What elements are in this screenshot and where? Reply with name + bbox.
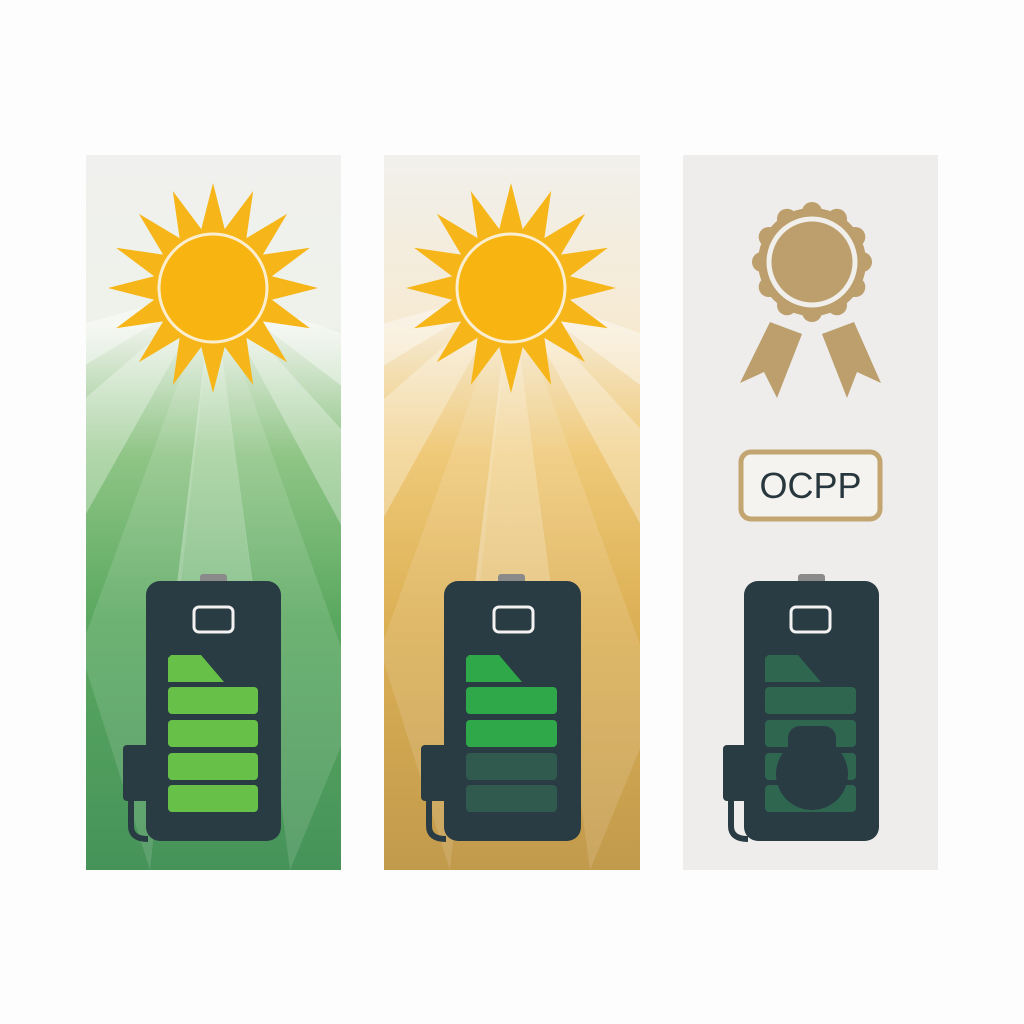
panel: solar green xyxy=(86,155,341,870)
OCPP label: OCPP xyxy=(759,465,862,506)
icon: sun xyxy=(406,183,616,393)
OCPP label xyxy=(741,452,880,519)
panel: certification xyxy=(683,155,938,870)
light beams green xyxy=(86,327,341,870)
panel: solar amber xyxy=(384,155,640,870)
icon: battery with charger plug xyxy=(723,574,879,841)
icon: battery full xyxy=(123,574,281,841)
icon: award badge xyxy=(740,202,881,398)
light beams amber xyxy=(384,308,640,870)
icon: battery partial xyxy=(421,574,581,841)
icon: sun xyxy=(108,183,318,393)
